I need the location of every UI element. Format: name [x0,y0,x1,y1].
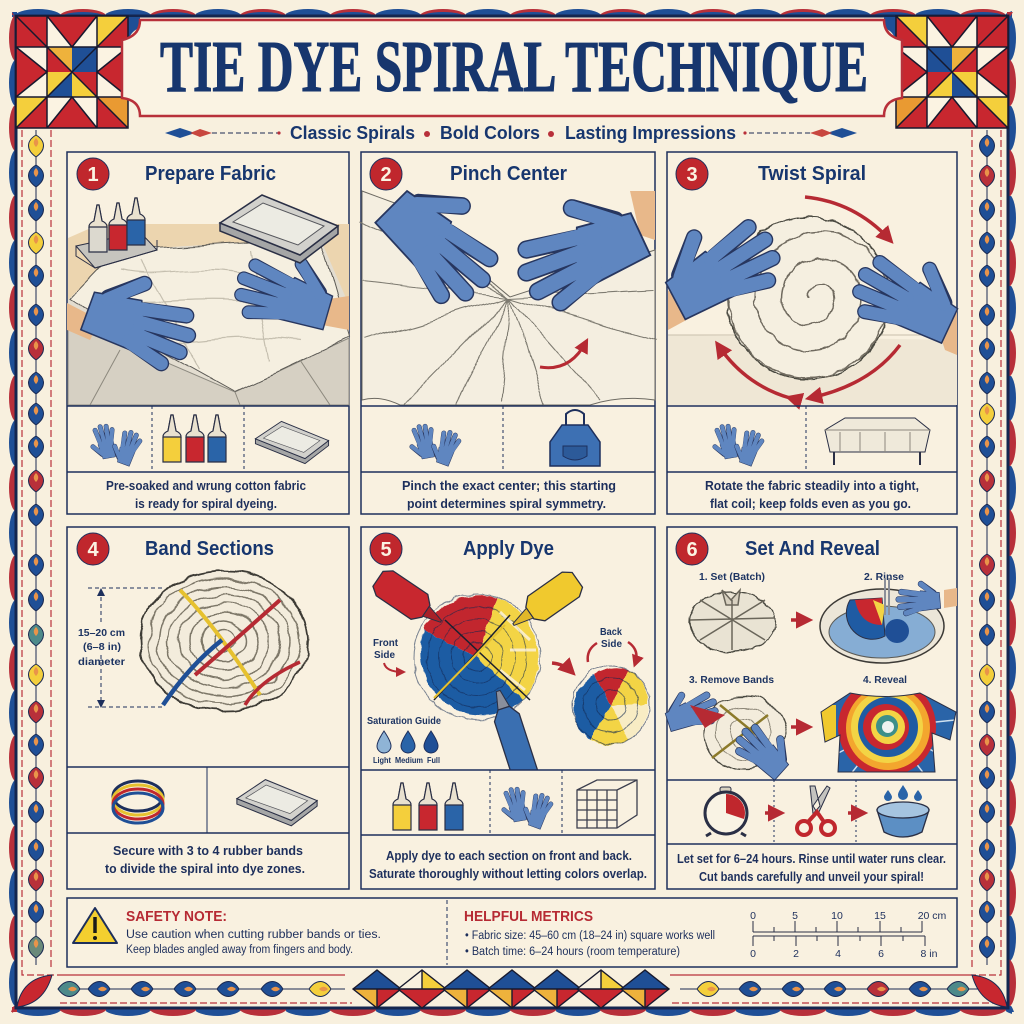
quilt corner: top left [16,16,128,128]
ruler: 15 [874,910,886,922]
quilt corner: top right [896,16,1008,128]
ruler: 0 [750,948,756,960]
caption: Pre-soaked and wrung cotton fabric [106,479,306,493]
step number 1: 1 [87,164,99,186]
icon: dye bottles [163,415,226,462]
icon: gloves [90,425,142,467]
divider lines [667,406,957,472]
ruler: 6 [878,948,884,960]
illustration: fabric gathered and pinched [362,171,655,405]
heading: Apply Dye [463,538,554,560]
divider lines [67,406,349,472]
illustration: fabric coil with hands [653,197,968,405]
caption [106,479,306,511]
step number 6: 6 [686,539,698,561]
illustration: bottles in rack [76,198,157,268]
helpful metrics text [464,909,715,958]
caption: Saturate thoroughly without letting colors overlap. [369,867,647,881]
caption [677,852,946,884]
label: back side: Side [601,638,622,650]
subtitle: Bold Colors [440,123,540,143]
caption: Let set for 6–24 hours. Rinse until water runs clear. [677,852,946,866]
panel: step 1 prepare fabric [67,152,349,514]
icon: stopwatch [705,787,747,836]
diameter dimension [78,588,165,708]
panel: step 2 pinch center [361,152,655,514]
saturation guide [367,715,441,765]
sub step: rinse: 2. Rinse [864,571,904,583]
diameter dimension: 15–20 cm [78,627,125,639]
caption: to divide the spiral into dye zones. [105,862,305,876]
step number 2: 2 [380,164,392,186]
sub step: reveal t-shirt: 4. Reveal [863,674,907,686]
sub step: reveal t-shirt [820,676,956,772]
caption [105,844,305,876]
saturation guide: Saturation Guide [367,715,441,727]
heading: Twist Spiral [758,163,866,185]
illustration: yellow bottle [505,568,586,637]
step number 3: 3 [686,164,698,186]
illustration: blue bottle [494,690,538,770]
divider lines [361,770,655,835]
divider lines [667,780,957,844]
caption: Pinch the exact center; this starting [402,479,616,493]
heading: Band Sections [145,538,274,560]
icon: warning triangle [73,908,117,943]
sub step: remove bands: 3. Remove Bands [689,674,774,686]
label: front side: Front [373,637,398,649]
helpful metrics text: HELPFUL METRICS [464,909,593,925]
icon: tray [255,421,329,464]
icon: tray [237,780,317,826]
title banner [122,20,902,116]
caption: Cut bands carefully and unveil your spiral! [699,870,924,884]
subtitle: Classic Spirals [290,123,415,143]
icon: gloves [501,788,553,830]
saturation guide: Light [373,756,391,765]
safety note text: Keep blades angled away from fingers and body. [126,944,353,956]
bottom bead chains and diamonds [17,970,1007,1008]
left bead chain [28,135,44,958]
icon: scissors [797,786,835,835]
caption [705,479,919,511]
step number 6 [676,533,708,565]
panel: step 6 set and reveal [662,527,960,889]
illustration: red bottle [370,566,449,634]
heading: Prepare Fabric [145,163,276,185]
ruler: 2 [793,948,799,960]
label: front side [373,637,403,672]
divider lines [361,406,655,472]
panel: step 5 apply dye [361,527,655,889]
caption: Rotate the fabric steadily into a tight, [705,479,919,493]
heading: Pinch Center [450,163,567,185]
icon: gloves [712,425,764,467]
safety note text: Use caution when cutting rubber bands or ties. [126,929,381,941]
heading: Set And Reveal [745,538,880,560]
safety note text [126,909,381,956]
subtitle: Lasting Impressions [565,123,736,143]
divider lines [67,767,349,833]
caption: is ready for spiral dyeing. [135,497,277,511]
icon: covered table [825,418,930,465]
illustration: fabric on table [67,224,349,405]
ruler: 4 [835,948,841,960]
panel: step 4 band sections [67,527,349,889]
caption: Apply dye to each section on front and back. [386,849,632,863]
step number 4: 4 [87,539,99,561]
caption: flat coil; keep folds even as you go. [710,497,911,511]
step number 5 [370,533,402,565]
right bead chain [980,135,994,958]
arrow [791,725,808,729]
saturation guide: Medium [395,756,423,765]
caption: Secure with 3 to 4 rubber bands [113,844,303,858]
icon: dye bottles [393,783,463,830]
caption [402,479,616,511]
ruler: 0 [750,910,756,922]
saturation guide: Full [427,756,440,765]
ruler: 20 cm [918,910,947,922]
panel: step 3 twist spiral [653,152,968,514]
subtitle [165,123,857,143]
illustration: front side dyed wheel [414,594,540,720]
step number 3 [676,158,708,190]
helpful metrics text: • Batch time: 6–24 hours (room temperature) [465,946,680,958]
illustration: back side wheel [572,666,650,745]
panel: safety and metrics [67,898,957,967]
ruler: 8 in [921,948,938,960]
step number 2 [370,158,402,190]
label: back side: Back [600,626,622,638]
illustration: metal tray [220,195,338,263]
label: front side: Side [374,649,395,661]
ruler [750,910,947,960]
icon: water bowl [877,785,929,837]
sub step: set batch: 1. Set (Batch) [699,571,765,583]
ruler: 10 [831,910,843,922]
icon: drying rack [577,780,637,828]
step number 5: 5 [380,539,392,561]
icon: rubber bands [113,781,163,823]
helpful metrics text: • Fabric size: 45–60 cm (18–24 in) square works well [465,930,715,942]
diameter dimension: diameter [78,656,125,668]
title: TIE DYE SPIRAL TECHNIQUE [160,26,868,108]
arrow [848,811,863,815]
step number 4 [77,533,109,565]
caption [369,849,647,881]
label: back side [552,626,636,672]
ruler: 5 [792,910,798,922]
arrow [791,618,808,622]
sub step: remove bands [662,674,797,782]
step number 1 [77,158,109,190]
icon: gloves [409,425,461,467]
diameter dimension: (6–8 in) [83,641,121,653]
sub step: set batch [689,571,775,652]
arrow [765,811,780,815]
icon: apron [550,410,600,466]
safety note text: SAFETY NOTE: [126,909,227,925]
sub step: rinse [820,571,957,663]
illustration: banded coil [140,571,308,711]
caption: point determines spiral symmetry. [407,497,606,511]
